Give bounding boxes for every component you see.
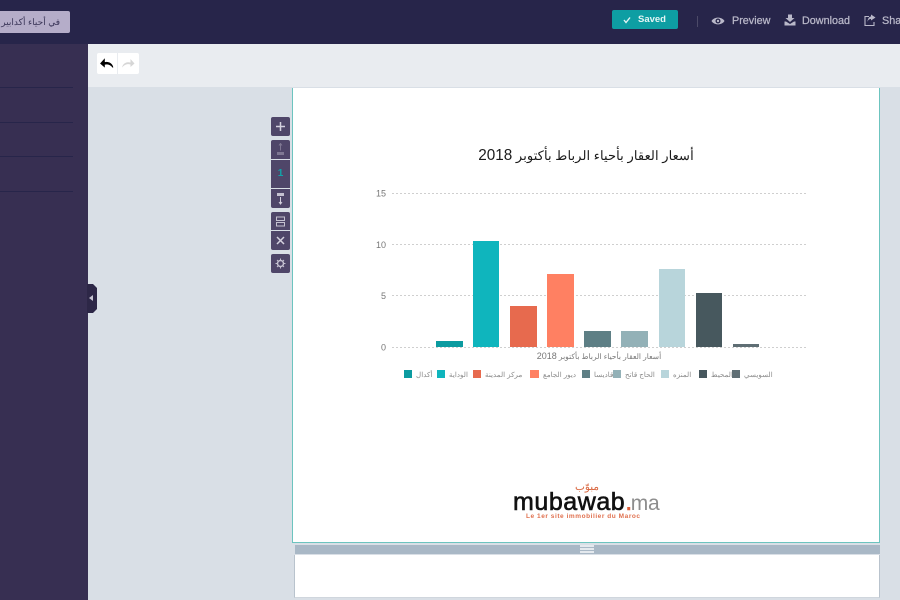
chart legend: قاديسا <box>594 370 613 379</box>
page controls <box>271 117 290 273</box>
share action <box>864 14 900 27</box>
preview action <box>712 15 770 27</box>
chart legend: السويسي <box>744 370 773 379</box>
chart title: أسعار العقار بأحياء الرباط بأكتوبر 2018 <box>478 147 694 164</box>
page number <box>271 160 290 188</box>
drag handle icon <box>580 545 594 554</box>
y axis labels: 15 <box>376 188 386 198</box>
settings button <box>271 254 290 273</box>
move down button <box>271 189 290 208</box>
redo button <box>118 53 139 74</box>
chart legend: الحاج قاتح <box>625 370 655 379</box>
bars <box>436 241 759 347</box>
logo tagline: Le 1er site immobilier du Maroc <box>526 513 641 520</box>
layout button <box>271 212 290 230</box>
y axis labels: 0 <box>381 342 386 352</box>
logo wordmark: mubawab.ma <box>513 488 659 516</box>
chart legend: ديور الجامع <box>543 370 576 379</box>
move up button <box>271 140 290 159</box>
chart legend: مركز المدينة <box>485 370 522 379</box>
toolbar separator <box>697 16 698 27</box>
page number: 1 <box>278 168 283 179</box>
document title field <box>0 11 70 33</box>
x axis label: أسعار العقار بأحياء الرباط بأكتوبر 2018 <box>537 351 661 361</box>
top navigation bar <box>0 0 900 44</box>
delete button <box>271 231 290 250</box>
chart legend: المنزه <box>673 370 691 379</box>
y axis labels: 10 <box>376 240 386 250</box>
infographic page <box>292 88 880 543</box>
y axis labels <box>376 188 386 352</box>
preview action: Preview <box>732 15 770 27</box>
chart legend <box>404 370 773 379</box>
chart legend: الوداية <box>449 370 468 379</box>
second page <box>294 555 880 598</box>
download action: Download <box>802 15 850 27</box>
bar chart <box>376 188 806 352</box>
y axis labels: 5 <box>381 291 386 301</box>
logo arabic mark: مبوّب <box>575 481 599 493</box>
mubawab logo <box>513 481 660 520</box>
sidebar collapse handle <box>87 284 97 313</box>
add page button <box>271 117 290 136</box>
left sidebar <box>0 44 88 600</box>
undo button <box>97 53 117 74</box>
undo redo toolbar <box>88 44 900 87</box>
chart legend: أكدال <box>416 370 432 379</box>
chart legend: المحيط <box>711 370 733 379</box>
saved button <box>612 10 678 29</box>
saved button: Saved <box>638 14 666 25</box>
page divider with drag handle <box>295 545 880 554</box>
